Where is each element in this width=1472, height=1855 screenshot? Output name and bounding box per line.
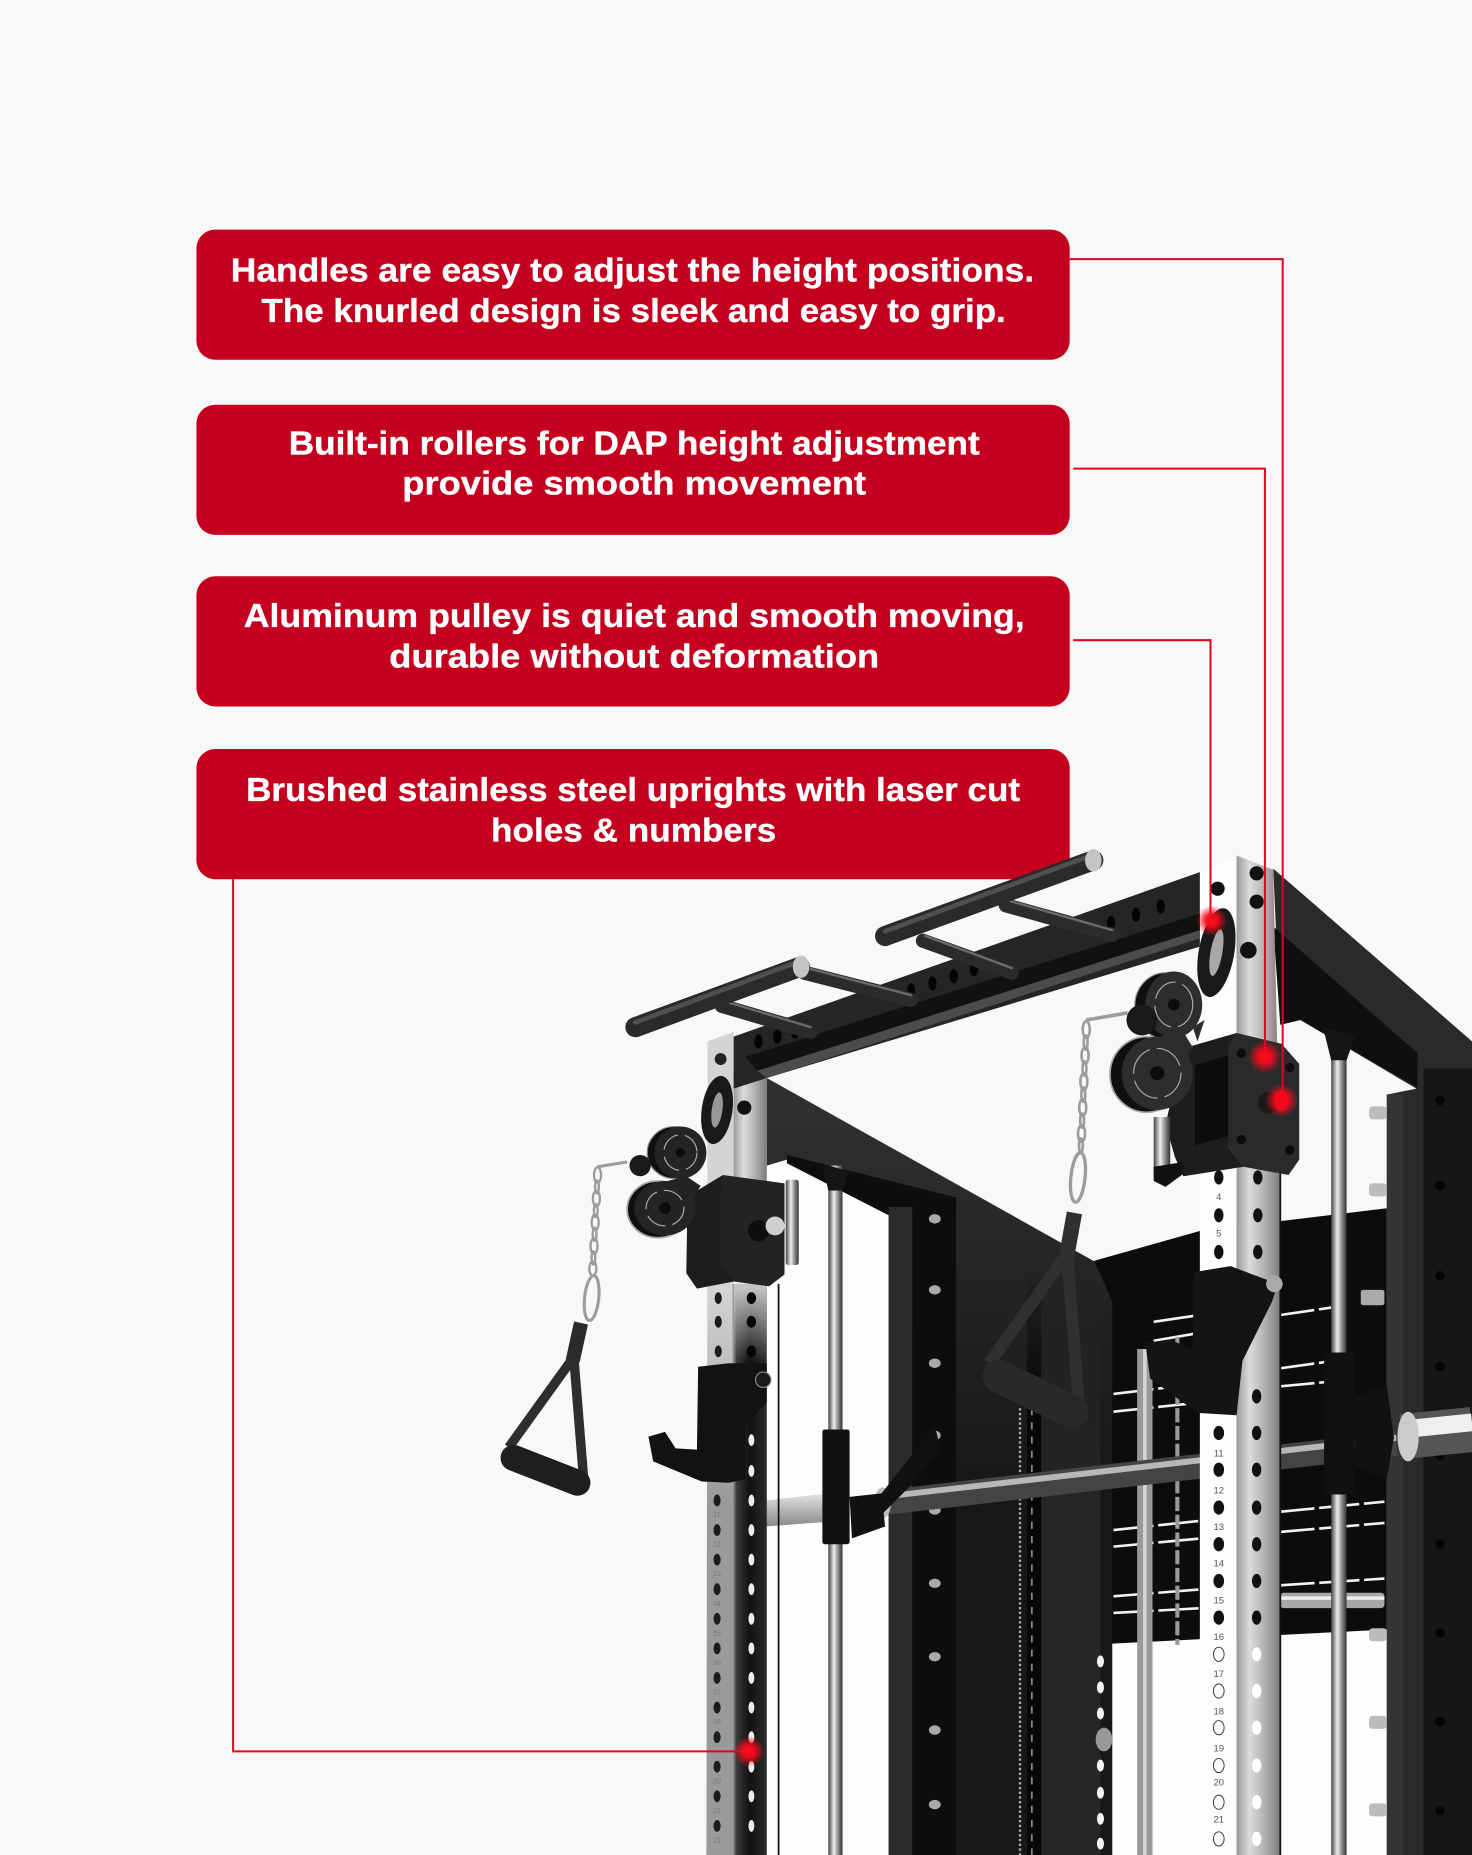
callout: uprights: holes & numbers bbox=[491, 812, 776, 849]
left handle bbox=[509, 1323, 583, 1483]
callout: rollers: Built-in rollers for DAP height adjustment bbox=[289, 425, 980, 462]
j-hook knob bbox=[1266, 1276, 1283, 1292]
connector line: uprights bbox=[233, 879, 749, 1751]
left upright numbers: 16 bbox=[713, 1659, 721, 1667]
callout boxes bbox=[196, 230, 1070, 879]
left upright numbers: 21 bbox=[713, 1807, 721, 1815]
right upright numbers: 14 bbox=[1214, 1559, 1224, 1570]
high pulley left bbox=[697, 1074, 737, 1146]
left upright numbers: 11 bbox=[713, 1511, 721, 1519]
right upright numbers bbox=[1214, 1192, 1224, 1825]
right pulley housing bbox=[1110, 972, 1299, 1187]
vertical guide rods bbox=[822, 1027, 1355, 1855]
left upright holes bbox=[714, 1292, 722, 1832]
right upright holes bbox=[1213, 1170, 1263, 1625]
right upright numbers: 16 bbox=[1214, 1632, 1224, 1643]
marker: pulley bbox=[1196, 905, 1227, 936]
right upright numbers: 13 bbox=[1214, 1522, 1224, 1533]
callout: rollers bbox=[196, 405, 1070, 535]
high pulley right bbox=[1191, 905, 1242, 1000]
left upright numbers: 22 bbox=[713, 1836, 721, 1844]
frame holes bbox=[1096, 1655, 1112, 1850]
left upright bbox=[706, 1032, 779, 1855]
white windows behind the frame bbox=[767, 1166, 1389, 1855]
left upright numbers: 13 bbox=[713, 1570, 721, 1578]
right chain bbox=[1068, 1013, 1128, 1203]
connector line: handles bbox=[1070, 259, 1283, 1101]
callout: pulley bbox=[196, 576, 1070, 706]
gym rack illustration bbox=[509, 849, 1472, 1855]
right upright numbers: 20 bbox=[1214, 1778, 1224, 1789]
callout: handles: The knurled design is sleek and easy to grip. bbox=[262, 293, 1006, 330]
right upright numbers: 5 bbox=[1216, 1229, 1221, 1240]
callout: handles: Handles are easy to adjust the height positions. bbox=[231, 253, 1034, 290]
smith carriage right bbox=[1324, 1353, 1394, 1495]
right j-hook bbox=[1145, 1266, 1278, 1415]
right upright numbers: 19 bbox=[1214, 1743, 1224, 1754]
marker: handles bbox=[1265, 1084, 1298, 1117]
right upright numbers: 21 bbox=[1214, 1814, 1224, 1825]
connector line: rollers bbox=[1073, 469, 1265, 1057]
panel clamp tube bbox=[1280, 1290, 1384, 1608]
right rear frame bbox=[1273, 869, 1472, 1855]
left upright numbers bbox=[713, 1511, 721, 1844]
callout: handles bbox=[196, 230, 1070, 360]
top beam bbox=[734, 872, 1200, 1089]
connector line: pulley bbox=[1073, 640, 1210, 921]
left upright numbers: 14 bbox=[713, 1600, 721, 1608]
callout: pulley: Aluminum pulley is quiet and smooth moving, bbox=[244, 598, 1025, 635]
marker: rollers bbox=[1248, 1040, 1281, 1073]
callout: uprights: Brushed stainless steel uprights with laser cut bbox=[246, 772, 1020, 809]
right upright numbers: 12 bbox=[1214, 1485, 1224, 1496]
monkey bars bbox=[635, 849, 1112, 1032]
right upright numbers: 15 bbox=[1214, 1595, 1224, 1606]
right frame pins bbox=[1369, 1106, 1387, 1816]
rear frame window and left frame bbox=[767, 1078, 1112, 1855]
right upright bbox=[1200, 856, 1280, 1855]
left upright numbers: 20 bbox=[713, 1777, 721, 1785]
callout: uprights bbox=[196, 749, 1070, 879]
smith carriage left bbox=[822, 1426, 941, 1544]
frame pins bbox=[929, 1214, 941, 1809]
left j-hook bbox=[648, 1363, 771, 1483]
right upright numbers: 4 bbox=[1216, 1192, 1221, 1203]
left upright numbers: 15 bbox=[713, 1629, 721, 1637]
callout: rollers: provide smooth movement bbox=[402, 466, 866, 503]
left upright numbers: 12 bbox=[713, 1541, 721, 1549]
weight stack rod and chain bbox=[1137, 1337, 1177, 1855]
back panel bbox=[1071, 1208, 1387, 1644]
left chain bbox=[582, 1162, 627, 1321]
marker: uprights bbox=[734, 1736, 764, 1767]
right upright numbers: 17 bbox=[1214, 1669, 1224, 1680]
left pulley housing bbox=[627, 1127, 799, 1289]
right upright numbers: 11 bbox=[1214, 1449, 1224, 1460]
callout: pulley: durable without deformation bbox=[389, 638, 879, 675]
left upright numbers: 17 bbox=[713, 1689, 721, 1697]
right upright numbers: 18 bbox=[1214, 1707, 1224, 1718]
left upright numbers: 18 bbox=[713, 1718, 721, 1726]
right handle bbox=[989, 1213, 1079, 1412]
barbell bbox=[766, 1412, 1472, 1527]
